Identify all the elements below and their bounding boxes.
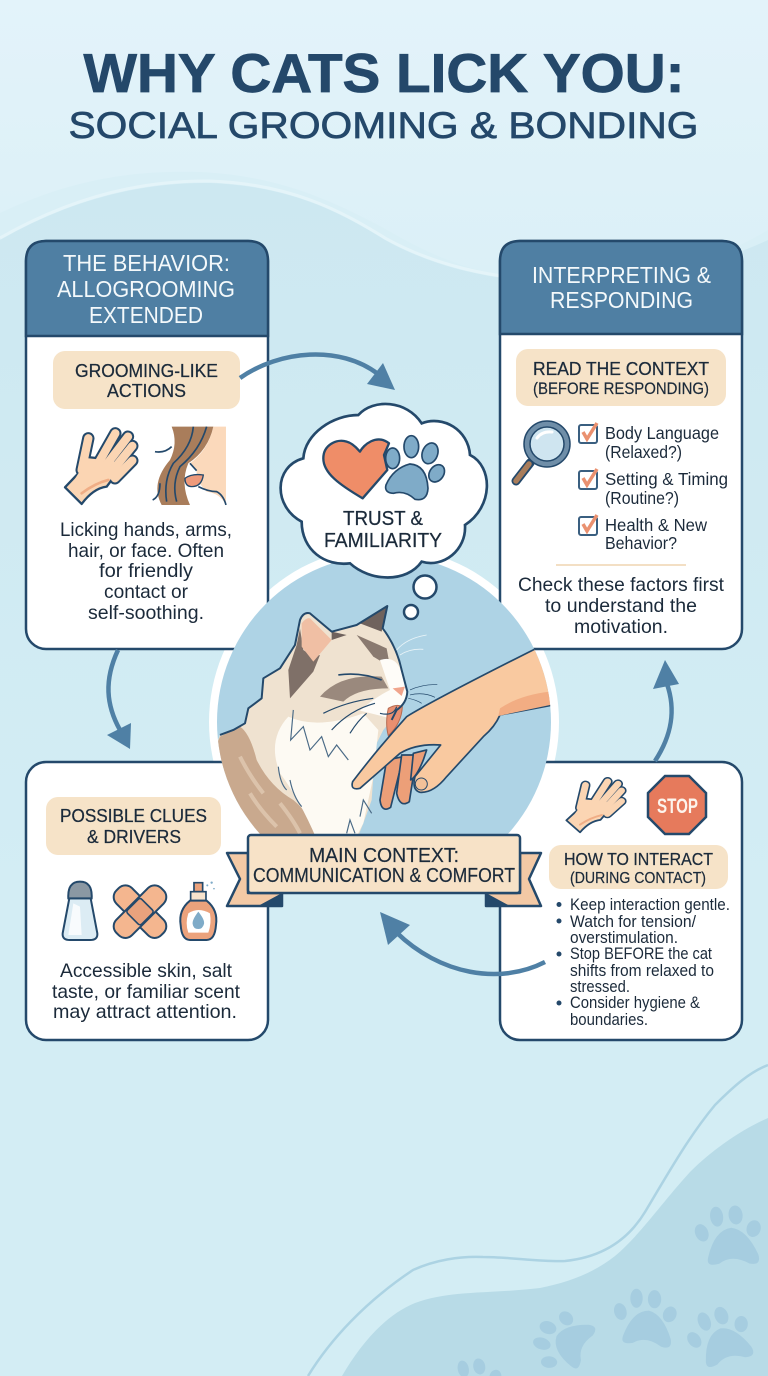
panel header: interpreting [500, 241, 742, 334]
pill: possible clues and drivers: POSSIBLE CLUES [60, 805, 207, 826]
list: interaction tips: Stop BEFORE the cat [570, 945, 712, 963]
pill: how to interact [549, 845, 728, 889]
paw prints decoration [440, 1200, 768, 1376]
checklist: Setting & Timing [605, 469, 728, 489]
text: behavior description: Licking hands, arms, [60, 519, 232, 541]
ribbon banner: main context [227, 835, 541, 906]
panel header: the behavior: ALLOGROOMING [57, 276, 235, 302]
pill: grooming-like actions: GROOMING-LIKE [75, 360, 218, 381]
icon: hair and tongue [153, 427, 226, 505]
thought bubble: trust and familiarity: TRUST & [343, 507, 423, 530]
list: interaction tips: shifts from relaxed to [570, 962, 714, 980]
pill: grooming-like actions: ACTIONS [107, 380, 186, 401]
pill: read the context [516, 349, 726, 406]
panel header: interpreting: INTERPRETING & [532, 262, 711, 288]
pill: possible clues and drivers [46, 797, 221, 855]
text: check these factors: to understand the [545, 595, 697, 617]
title: SOCIAL GROOMING & BONDING [68, 105, 698, 146]
pill: read the context: READ THE CONTEXT [533, 358, 709, 379]
text: check these factors: motivation. [574, 616, 668, 638]
list: interaction tips: Keep interaction gentle. [570, 896, 730, 914]
pill: read the context: (BEFORE RESPONDING) [533, 380, 709, 398]
arrow: interact to clues [380, 912, 545, 974]
text: check these factors: Check these factors first [518, 574, 725, 596]
fingers behind palm [380, 750, 427, 809]
panel: interpreting and responding [500, 241, 742, 649]
checklist: Health & New [605, 515, 707, 535]
text: behavior description: self-soothing. [88, 602, 204, 624]
central illustration: cat licking hand [217, 563, 551, 834]
arrow: interact to interpreting [653, 660, 679, 761]
pill: grooming-like actions [53, 351, 240, 409]
panel: the behavior [26, 241, 268, 649]
cat [210, 606, 437, 840]
text: check these factors [518, 574, 725, 638]
panel: how to interact [500, 762, 742, 1040]
panel header: interpreting: RESPONDING [550, 287, 693, 313]
thought bubble: trust and familiarity [281, 404, 487, 619]
checklist [579, 423, 728, 553]
icon: stop sign: STOP [657, 795, 698, 818]
icon: lotion bottle [180, 881, 216, 940]
icon: stop sign [648, 776, 706, 834]
panel header: the behavior [26, 241, 268, 336]
text: behavior description: hair, or face. Often [68, 540, 224, 562]
text: clues description: taste, or familiar scent [52, 981, 241, 1003]
list: interaction tips: overstimulation. [570, 929, 678, 947]
ribbon banner: main context: MAIN CONTEXT: [309, 845, 459, 867]
title [68, 42, 698, 146]
ribbon banner: main context: COMMUNICATION & COMFORT [253, 865, 515, 887]
icon: magnifying glass [516, 421, 570, 481]
pill: how to interact: HOW TO INTERACT [564, 849, 713, 869]
list: interaction tips [556, 896, 730, 1029]
title: WHY CATS LICK YOU: [84, 42, 684, 104]
panel header: the behavior: EXTENDED [89, 302, 203, 328]
cloud outline [281, 404, 487, 577]
list: interaction tips: Watch for tension/ [570, 913, 696, 931]
text: behavior description: for friendly [99, 560, 193, 582]
text: clues description: may attract attention. [53, 1001, 237, 1023]
text: behavior description [60, 519, 232, 624]
arrow: behavior to clues [107, 650, 131, 749]
white ring behind central illustration [209, 559, 559, 761]
hand [352, 640, 558, 809]
list: interaction tips: Consider hygiene & [570, 994, 700, 1012]
panel header: the behavior: THE BEHAVIOR: [63, 250, 230, 276]
icon: salt shaker [63, 882, 97, 940]
pill: possible clues and drivers: & DRIVERS [87, 826, 181, 847]
pill: how to interact: (DURING CONTACT) [570, 870, 706, 887]
text: clues description [52, 960, 241, 1023]
checklist: (Relaxed?) [605, 442, 682, 462]
text: behavior description: contact or [104, 581, 188, 603]
panel: possible clues [26, 762, 268, 1040]
checklist: (Routine?) [605, 488, 679, 508]
text: clues description: Accessible skin, salt [60, 960, 233, 982]
icon: heart [323, 439, 389, 498]
icon: hand raised [566, 781, 622, 832]
checklist: Body Language [605, 423, 719, 443]
checklist: Behavior? [605, 533, 677, 553]
arrow: behavior to trust [240, 354, 395, 390]
thought bubble: trust and familiarity: FAMILIARITY [324, 529, 442, 552]
list: interaction tips: stressed. [570, 978, 630, 996]
icon: hand [65, 433, 132, 504]
icon: bandage [110, 881, 170, 942]
icon: paw [386, 436, 448, 500]
list: interaction tips: boundaries. [570, 1011, 648, 1029]
